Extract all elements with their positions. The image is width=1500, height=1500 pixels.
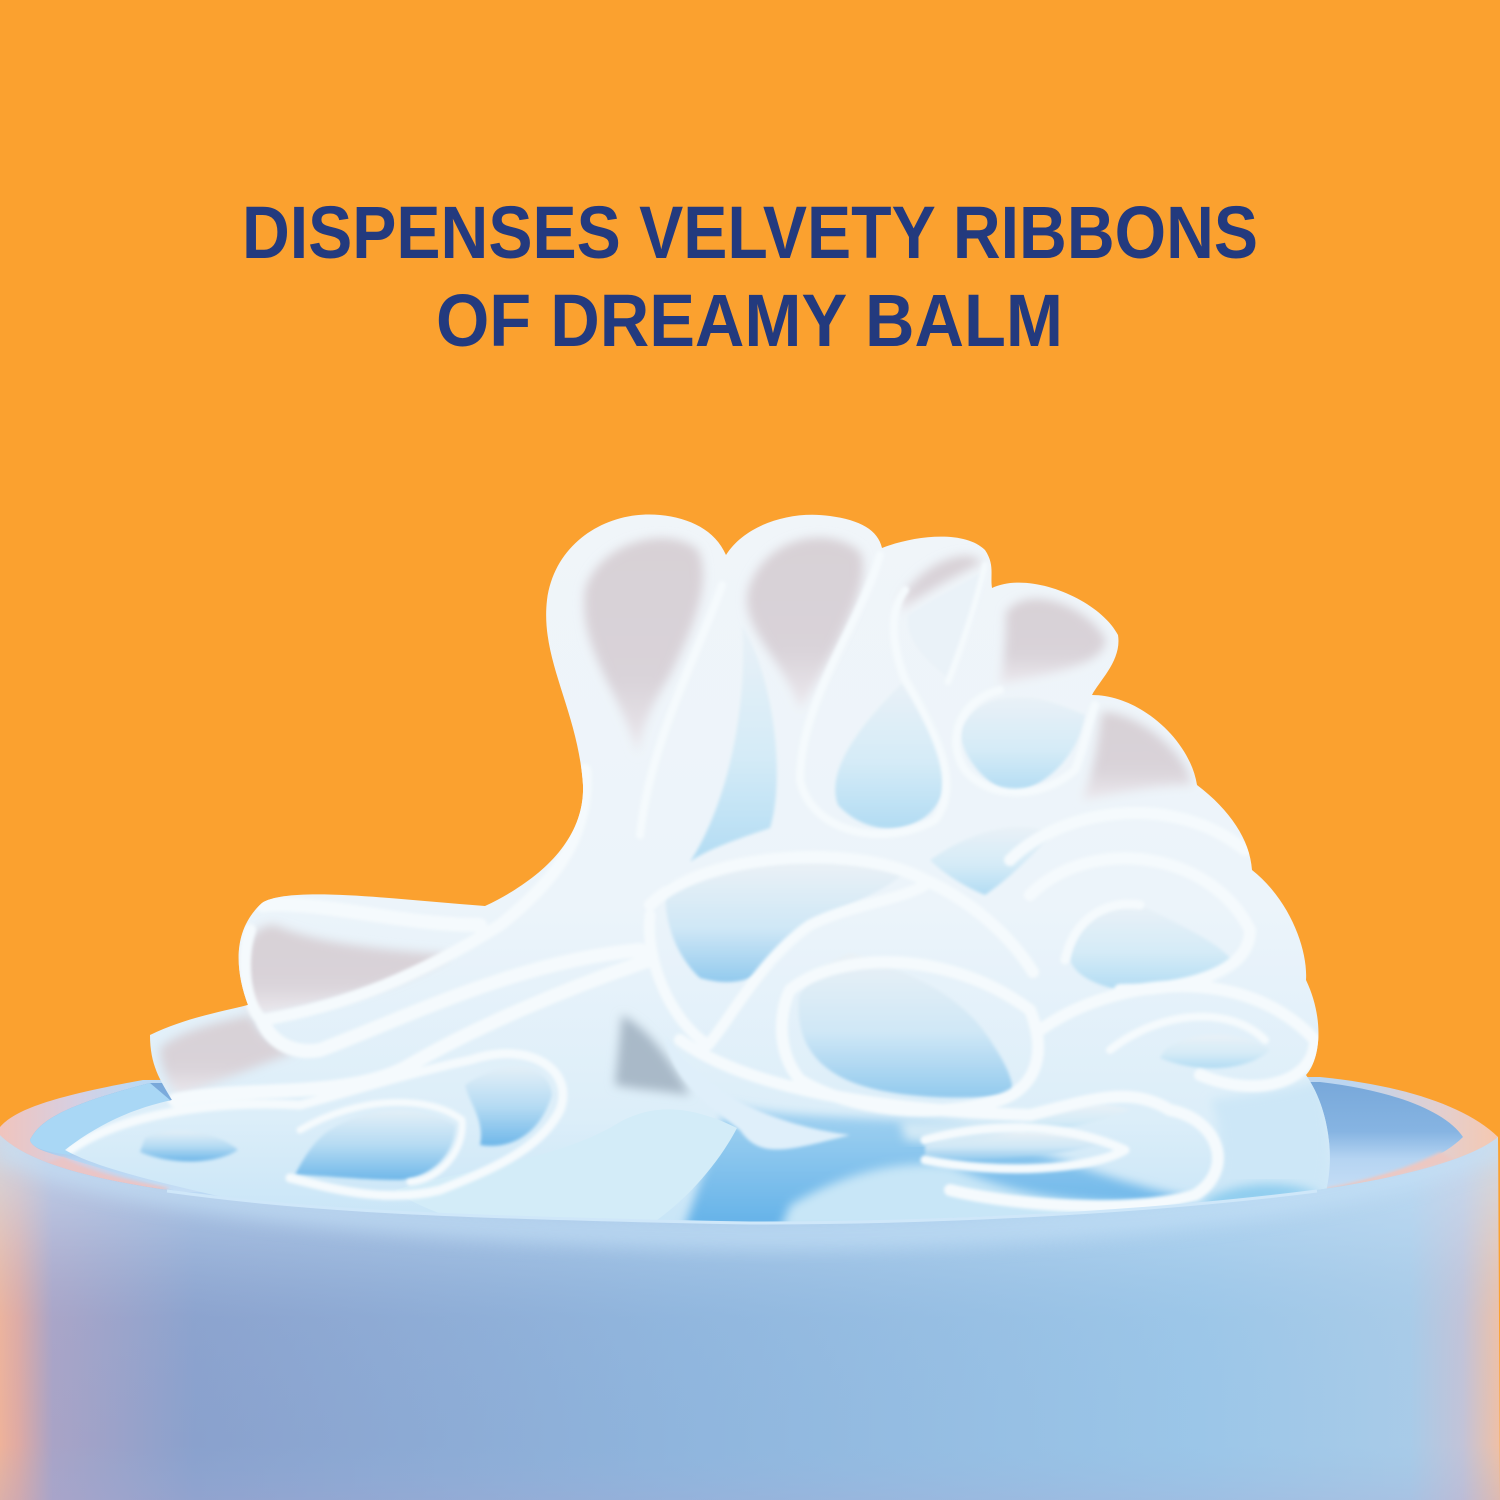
blue pockets [139, 642, 1266, 1182]
balm ribbons [65, 514, 1330, 1230]
ribbon silhouette [65, 514, 1330, 1224]
cup rim and interior [0, 1077, 1498, 1240]
mauve top folds [160, 538, 1192, 1096]
title: DISPENSES VELVETY RIBBONS [242, 191, 1258, 274]
cup body [0, 1135, 1500, 1500]
deep blue lower folds [395, 1015, 1330, 1230]
title: OF DREAMY BALM [436, 279, 1063, 362]
ribbon edges [70, 555, 1315, 1206]
soft shadow below ring [897, 1120, 988, 1147]
soft shaded folds, clipped to the ribbon silhouette [140, 538, 1330, 1230]
title [242, 191, 1258, 362]
